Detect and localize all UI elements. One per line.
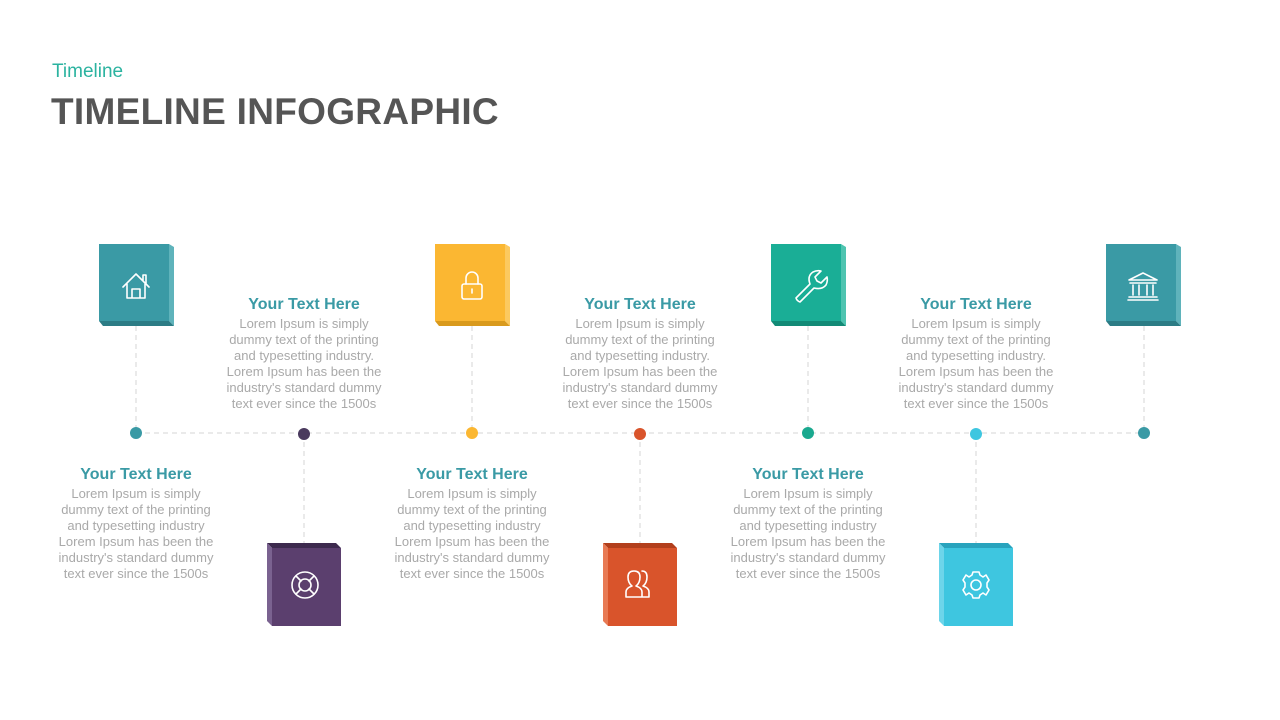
timeline dots xyxy=(130,427,1150,440)
box 2: lifebuoy xyxy=(267,543,341,626)
text block 6 (top): dummy text of the printing xyxy=(901,332,1051,347)
icon: lock xyxy=(462,272,482,299)
box 4: users xyxy=(603,543,677,626)
text block 5 (bottom): Lorem Ipsum has been the xyxy=(731,534,885,549)
text block 1 (bottom left): and typesetting industry xyxy=(67,518,205,533)
timeline axis xyxy=(136,326,1144,543)
text block 3 (bottom) xyxy=(395,466,550,581)
text block 6 (top): Lorem Ipsum has been the xyxy=(899,364,1053,379)
text block 1 (bottom left) xyxy=(59,466,214,581)
text block 5 (bottom) xyxy=(731,466,886,581)
text block 2 (top): text ever since the 1500s xyxy=(232,396,377,411)
icon: wrench xyxy=(796,271,827,302)
text block 1 (bottom left): Lorem Ipsum has been the xyxy=(59,534,213,549)
box 5: wrench xyxy=(771,244,846,326)
text block 2 (top): and typesetting industry. xyxy=(234,348,374,363)
text block 1 (bottom left): text ever since the 1500s xyxy=(64,566,209,581)
text block 4 (top): industry's standard dummy xyxy=(563,380,718,395)
icon: bank xyxy=(1128,273,1158,300)
icon: lifebuoy xyxy=(292,572,318,598)
text block 4 (top): dummy text of the printing xyxy=(565,332,715,347)
text block 1 (bottom left): dummy text of the printing xyxy=(61,502,211,517)
icon: users xyxy=(626,571,649,597)
text block 4 (top): Lorem Ipsum has been the xyxy=(563,364,717,379)
box 1: home xyxy=(99,244,174,326)
text block 4 (top): Your Text Here xyxy=(584,296,696,313)
icon: house xyxy=(123,274,149,298)
text block 1 (bottom left): Lorem Ipsum is simply xyxy=(71,486,201,501)
text block 1 (bottom left): industry's standard dummy xyxy=(59,550,214,565)
text block 2 (top) xyxy=(227,296,382,411)
text block 3 (bottom): dummy text of the printing xyxy=(397,502,547,517)
text block 6 (top): Lorem Ipsum is simply xyxy=(911,316,1041,331)
text block 5 (bottom): Lorem Ipsum is simply xyxy=(743,486,873,501)
text block 2 (top): Your Text Here xyxy=(248,296,360,313)
icon: gear xyxy=(963,572,989,598)
text block 6 (top): text ever since the 1500s xyxy=(904,396,1049,411)
box 3: lock xyxy=(435,244,510,326)
text block 4 (top) xyxy=(563,296,718,411)
text block 4 (top): text ever since the 1500s xyxy=(568,396,713,411)
text block 3 (bottom): Your Text Here xyxy=(416,466,528,483)
text block 6 (top): industry's standard dummy xyxy=(899,380,1054,395)
text block 3 (bottom): Lorem Ipsum has been the xyxy=(395,534,549,549)
text block 2 (top): industry's standard dummy xyxy=(227,380,382,395)
text block 6 (top) xyxy=(899,296,1054,411)
text block 6 (top): and typesetting industry. xyxy=(906,348,1046,363)
text block 4 (top): and typesetting industry. xyxy=(570,348,710,363)
box 7: bank xyxy=(1106,244,1181,326)
text block 3 (bottom): Lorem Ipsum is simply xyxy=(407,486,537,501)
text block 5 (bottom): industry's standard dummy xyxy=(731,550,886,565)
text block 3 (bottom): text ever since the 1500s xyxy=(400,566,545,581)
subtitle: Timeline xyxy=(52,61,123,82)
text block 5 (bottom): and typesetting industry xyxy=(739,518,877,533)
text block 2 (top): dummy text of the printing xyxy=(229,332,379,347)
text block 2 (top): Lorem Ipsum is simply xyxy=(239,316,369,331)
text block 2 (top): Lorem Ipsum has been the xyxy=(227,364,381,379)
text block 5 (bottom): Your Text Here xyxy=(752,466,864,483)
text block 5 (bottom): text ever since the 1500s xyxy=(736,566,881,581)
box 6: gear xyxy=(939,543,1013,626)
text block 4 (top): Lorem Ipsum is simply xyxy=(575,316,705,331)
text block 3 (bottom): industry's standard dummy xyxy=(395,550,550,565)
text block 1 (bottom left): Your Text Here xyxy=(80,466,192,483)
text block 5 (bottom): dummy text of the printing xyxy=(733,502,883,517)
title: TIMELINE INFOGRAPHIC xyxy=(51,91,499,132)
text block 6 (top): Your Text Here xyxy=(920,296,1032,313)
text block 3 (bottom): and typesetting industry xyxy=(403,518,541,533)
